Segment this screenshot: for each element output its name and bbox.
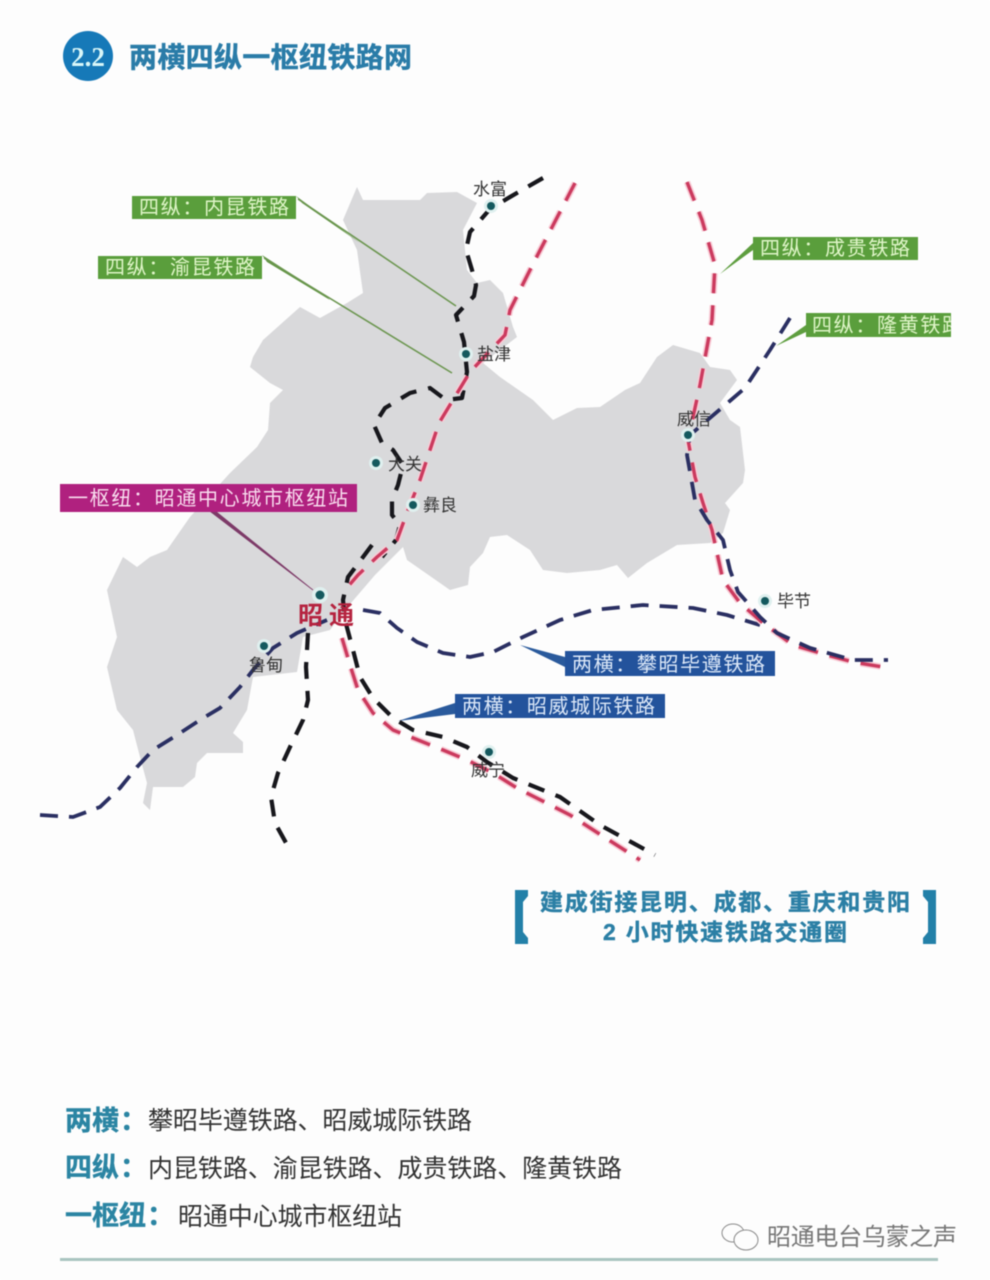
row: 两横: 两横：: [65, 1106, 147, 1136]
city: 水富: 水富: [473, 180, 507, 199]
section number badge: 2.2: [71, 42, 105, 72]
city: 鲁甸: [249, 639, 283, 675]
railway: 昭威 red dashed: [342, 638, 640, 860]
row: 一枢纽: 一枢纽：: [65, 1201, 174, 1231]
railway: 成贵铁路 red dashed: [687, 182, 883, 667]
city: 毕节: 毕节: [777, 592, 811, 611]
callout: 2 hour rail circle: [515, 889, 936, 945]
left bracket: [515, 890, 528, 944]
footer rule: [60, 1258, 938, 1261]
callout text: 建成街接昆明、成都、重庆和贵阳: [540, 889, 910, 915]
leader line: 隆黄铁路: [776, 325, 806, 346]
leader line: 枢纽站: [211, 510, 313, 590]
map: Zhaotong region: [107, 187, 745, 810]
label: 四纵 隆黄铁路: [806, 310, 971, 340]
summary list: [65, 1106, 622, 1231]
railway: 隆黄铁路 navy dashed: [687, 318, 888, 660]
city: 大关: [369, 455, 422, 474]
railway: 渝昆铁路 red dashed: [345, 183, 575, 590]
leader line: 昭威城际铁路: [398, 703, 455, 721]
city: 昭通: 昭通: [298, 602, 354, 630]
city: 大关: 大关: [388, 455, 422, 474]
row: 一枢纽: [65, 1201, 402, 1231]
city: 威宁: [471, 745, 505, 780]
row: 两横: 攀昭毕遵铁路、昭威城际铁路: [148, 1107, 472, 1135]
label: 四纵 渝昆铁路: 四纵：渝昆铁路: [105, 256, 255, 279]
label: 两横 攀昭毕遵铁路: 两横：攀昭毕遵铁路: [572, 653, 765, 676]
leader line: 攀昭毕遵铁路: [520, 645, 565, 667]
city: 威信: [677, 410, 711, 442]
label: 四纵 隆黄铁路: 四纵：隆黄铁路: [812, 314, 962, 337]
label: 两横 昭威城际铁路: 两横：昭威城际铁路: [462, 695, 655, 718]
city: 彝良: 彝良: [423, 496, 457, 515]
callout: 2 hour rail circle: 2 小时快速铁路交通圈: [603, 919, 847, 945]
city: 盐津: [459, 345, 511, 364]
title: 两横四纵一枢纽铁路网: [129, 42, 412, 73]
city: 威信: 威信: [677, 410, 711, 429]
right bracket: [923, 890, 936, 944]
city: 水富: [473, 180, 507, 213]
row: 四纵: 内昆铁路、渝昆铁路、成贵铁路、隆黄铁路: [148, 1155, 622, 1183]
city: 鲁甸: 鲁甸: [249, 656, 283, 675]
city: 昭通: [298, 587, 354, 630]
railway: 内昆铁路 black dashed: [374, 178, 543, 557]
leader line: 内昆铁路: [296, 196, 456, 306]
leader line: 成贵铁路: [720, 243, 753, 274]
railway: 攀昭毕遵铁路 navy dashed: [40, 605, 760, 817]
label: 一枢纽 昭通中心城市枢纽站: 一枢纽：昭通中心城市枢纽站: [68, 487, 348, 510]
watermark: WeChat icon: [722, 1224, 758, 1250]
railway: black line through Zhaotong to Weining: [343, 545, 655, 855]
leader line: 渝昆铁路: [262, 255, 452, 373]
row: 四纵: 四纵：: [65, 1153, 147, 1183]
label: 四纵 内昆铁路: 四纵：内昆铁路: [139, 196, 289, 219]
label: 四纵 成贵铁路: 四纵：成贵铁路: [760, 237, 910, 260]
city: 毕节: [758, 592, 811, 611]
section number badge: [63, 31, 113, 81]
row: 一枢纽: 昭通中心城市枢纽站: [178, 1203, 402, 1231]
watermark text: 昭通电台乌蒙之声: [767, 1224, 957, 1251]
railway: southern black line: [271, 633, 308, 850]
city: 盐津: 盐津: [477, 345, 511, 364]
city: 威宁: 威宁: [471, 761, 505, 780]
city: 彝良: [406, 496, 457, 515]
